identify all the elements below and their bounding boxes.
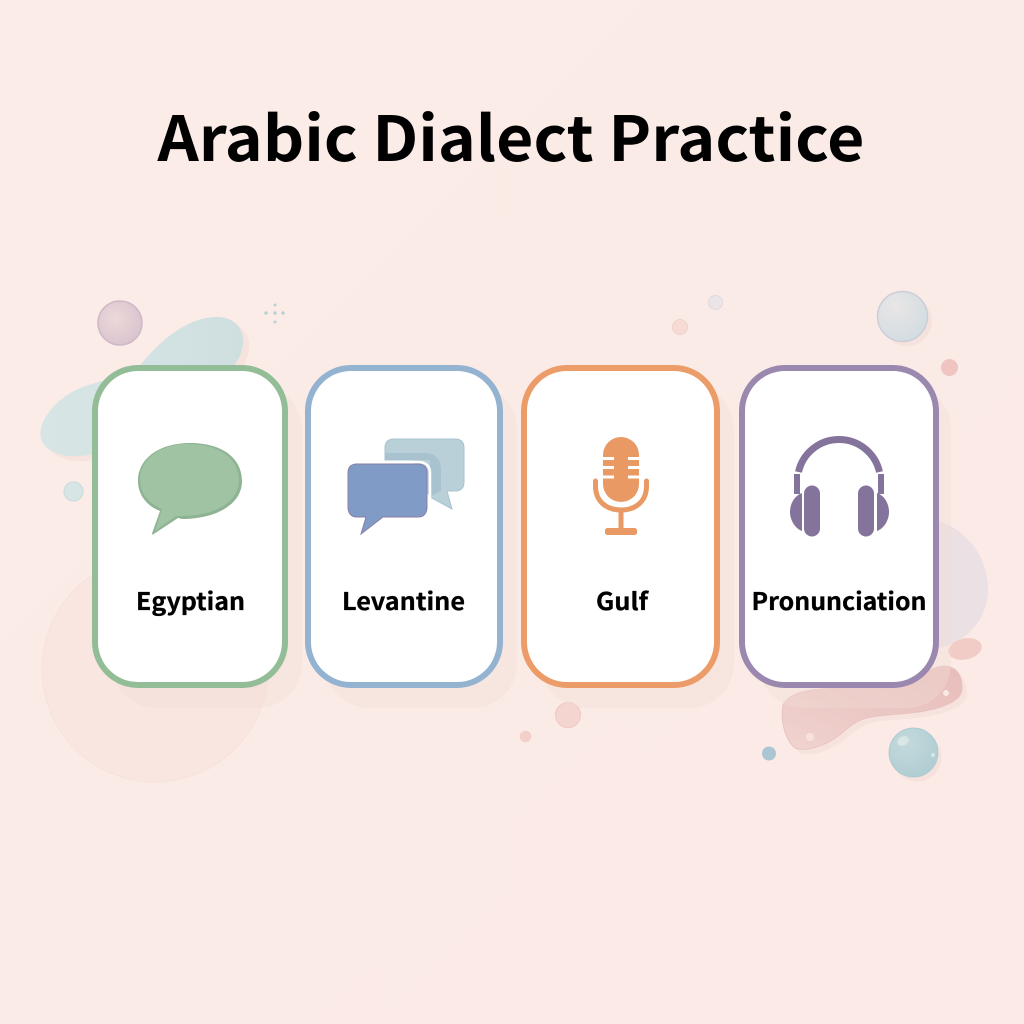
blob: pink lower right (782, 666, 962, 749)
bubble: small lavender top (708, 296, 722, 310)
bubble: tiny pink lower centre (520, 731, 531, 742)
bubble: teal lower right (889, 728, 938, 777)
panel: Gulf (524, 368, 717, 685)
blob: faint peach circle lower left (42, 556, 268, 782)
icon: white halo and outline on front bubble (348, 462, 430, 534)
card frame (742, 368, 936, 685)
label: Egyptian (136, 582, 245, 617)
bubble shadow: teal lower right (892, 732, 942, 782)
card frame (308, 368, 500, 685)
blob shadow: teal upper left (46, 322, 249, 461)
decorative background shapes (40, 292, 988, 782)
blob: small pink right (946, 635, 984, 663)
bubble: large blue-grey upper right (878, 292, 928, 342)
blob: faint lavender right (925, 518, 988, 650)
panel: Pronunciation (742, 368, 936, 685)
icon: rear speech bubble (385, 439, 464, 509)
bubble: small blue lower right (762, 746, 776, 760)
bubble: small pink top (672, 320, 688, 334)
icon: green speech bubble (138, 443, 242, 535)
icon: headphones (790, 440, 889, 536)
title: Arabic Dialect Practice (156, 89, 864, 179)
label: Levantine (342, 582, 465, 617)
icon: front speech bubble (348, 464, 427, 534)
highlight dots on pink blob (806, 690, 949, 741)
panel: Levantine (308, 368, 500, 685)
card shadows (112, 385, 951, 708)
bubble: pink lower centre (556, 702, 580, 728)
card frame (95, 368, 285, 685)
blob shadow: pink lower right (787, 671, 967, 754)
dots: teal sparkle (264, 304, 285, 324)
bubble: mauve upper left (98, 301, 142, 345)
icon: microphone (596, 437, 646, 535)
bubble: small pink right (941, 359, 958, 376)
bubble shadow: large blue-grey upper right (882, 296, 932, 346)
label: Pronunciation (752, 582, 926, 617)
panel: Egyptian (95, 368, 285, 685)
bubble: small teal left (64, 482, 83, 501)
card frame (524, 368, 717, 685)
blob: pale teal upper left (40, 317, 243, 456)
label: Gulf (596, 582, 649, 617)
